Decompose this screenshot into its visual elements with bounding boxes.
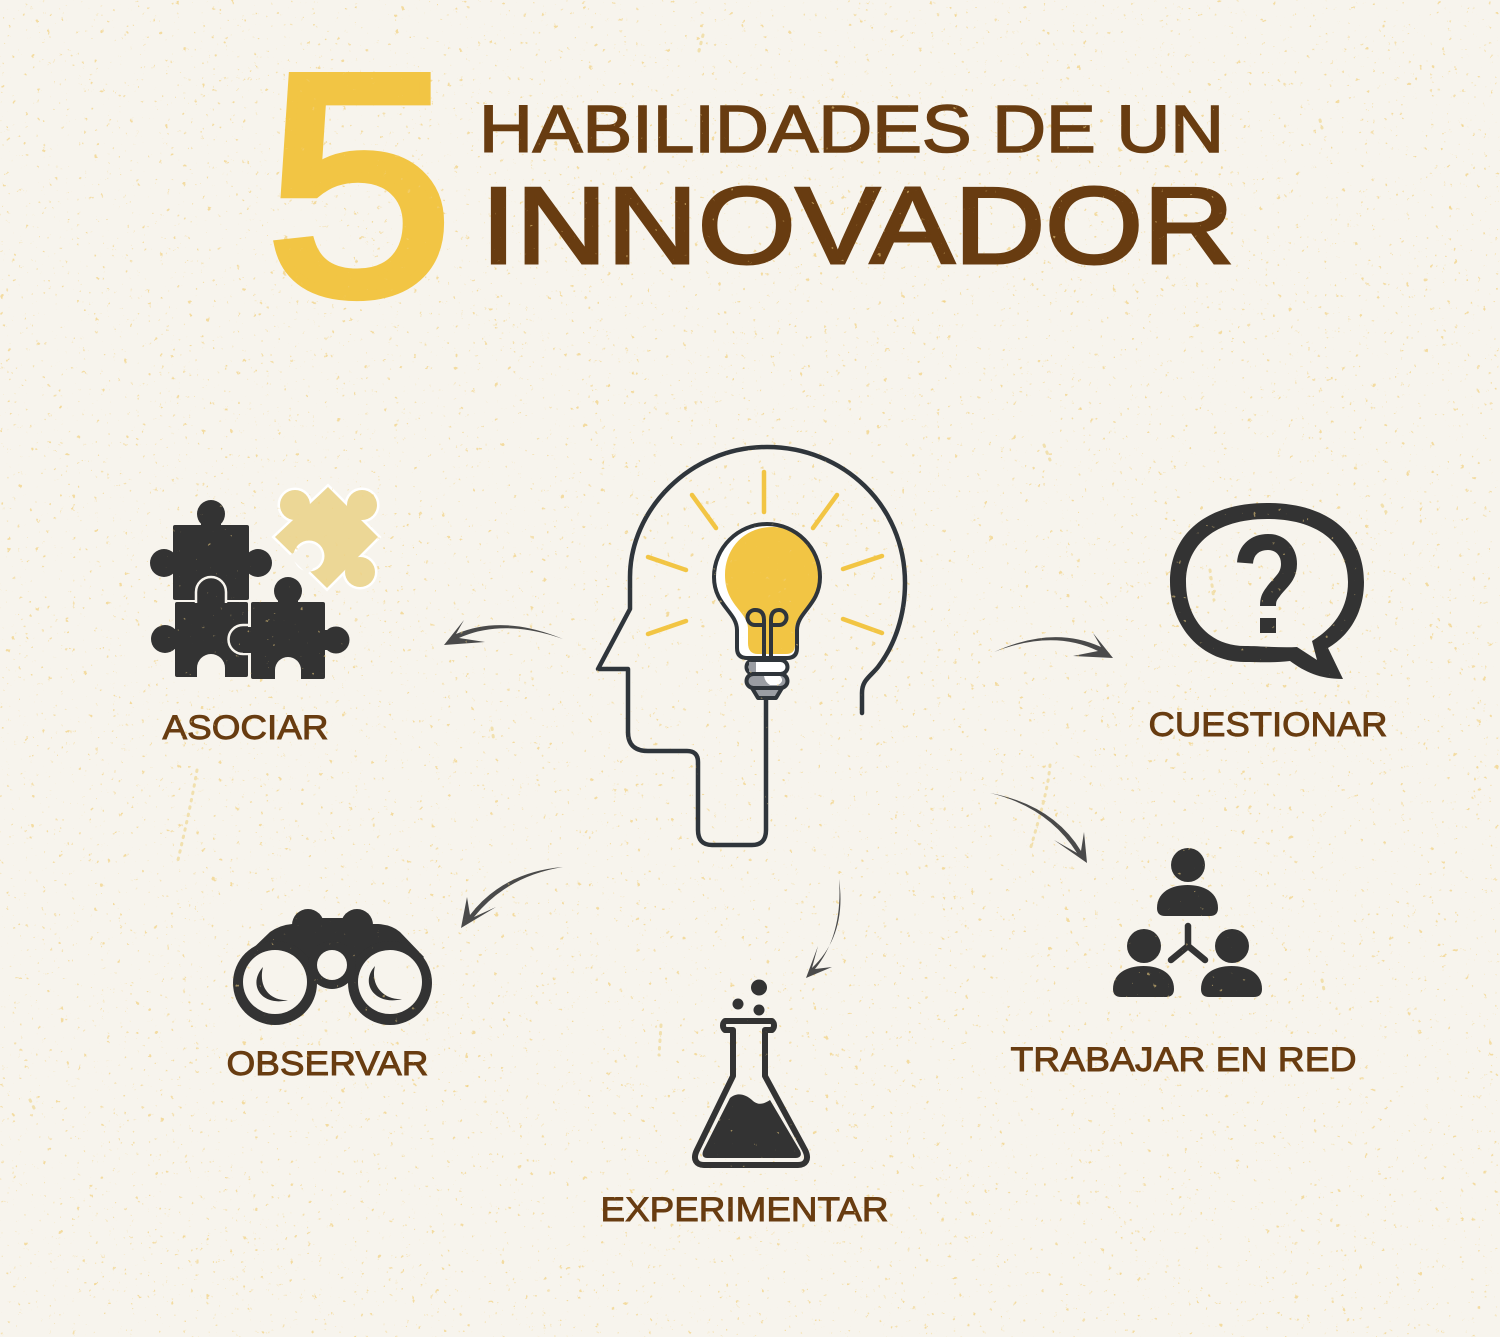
icon: puzzle pieces <box>150 487 378 680</box>
icon: flask <box>695 980 807 1165</box>
title line 1: HABILIDADES DE UN <box>479 92 1224 167</box>
label: experimentar: EXPERIMENTAR <box>600 1191 888 1229</box>
arrow to experimentar <box>806 879 840 978</box>
icon: binoculars <box>233 909 432 1025</box>
label: cuestionar: CUESTIONAR <box>1148 706 1388 744</box>
arrow to asociar <box>444 620 563 645</box>
label: observar: OBSERVAR <box>226 1045 428 1083</box>
arrow to trabajar en red <box>990 793 1087 863</box>
head outline <box>598 447 905 845</box>
arrow to observar <box>461 867 563 928</box>
label: trabajar en red: TRABAJAR EN RED <box>1010 1041 1356 1079</box>
flask outline <box>695 1021 807 1165</box>
arrow to cuestionar <box>994 633 1113 658</box>
label: asociar: ASOCIAR <box>162 709 328 747</box>
liquid <box>703 1094 801 1158</box>
title <box>266 9 1234 360</box>
icon: network of people <box>1113 848 1262 997</box>
question mark <box>1245 542 1289 633</box>
filament <box>748 610 786 658</box>
dark puzzle piece: top <box>150 500 272 600</box>
central head with light bulb <box>598 447 905 845</box>
light bulb <box>714 524 820 698</box>
light puzzle piece <box>275 487 378 588</box>
icon: speech bubble with question mark <box>1170 503 1364 679</box>
light rays <box>648 472 882 634</box>
title line 2: INNOVADOR <box>481 165 1234 287</box>
bulb base <box>746 660 788 698</box>
dark puzzle piece: bottom right <box>228 577 350 680</box>
big number 5: 5 <box>266 9 453 360</box>
bubbles <box>732 980 767 1016</box>
dark puzzle piece: bottom left <box>151 577 248 678</box>
